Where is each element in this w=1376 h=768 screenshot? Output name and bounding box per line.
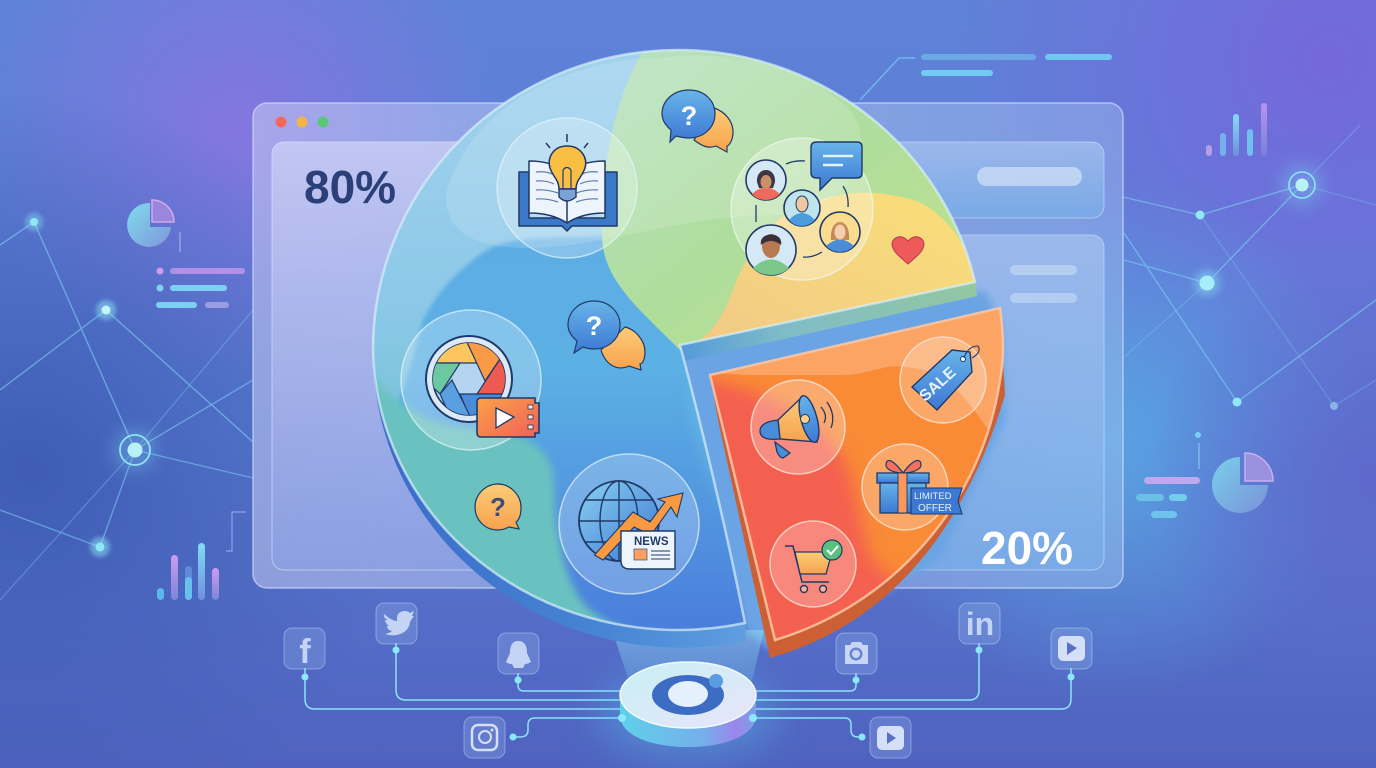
panel lines xyxy=(1010,265,1077,303)
social icon: facebook xyxy=(284,628,325,671)
person avatar xyxy=(784,190,820,226)
social icon: video xyxy=(870,717,911,758)
colour region: yellow xyxy=(696,193,985,343)
icon: gift limited offer xyxy=(862,444,962,530)
social icon: twitter xyxy=(376,603,417,644)
person avatar xyxy=(820,212,860,252)
large pie: 20% slice xyxy=(708,306,1005,658)
label: 80%: 80% xyxy=(304,161,396,213)
icon: globe and news xyxy=(559,454,699,594)
icon: globe and news: NEWS xyxy=(634,536,669,548)
social icon: camera xyxy=(836,633,877,674)
icon: question speech bubbles centre xyxy=(568,301,645,370)
icon: question bubble orange: ? xyxy=(490,492,506,522)
person avatar xyxy=(746,160,786,200)
colour region: teal xyxy=(376,377,622,624)
chat bubble xyxy=(811,142,862,190)
social icon: linkedin: in xyxy=(966,606,994,642)
icon: gift limited offer: LIMITED xyxy=(914,491,952,502)
icon: question speech bubbles top xyxy=(662,90,733,152)
icon: book and lightbulb xyxy=(497,118,637,258)
label: 20%: 20% xyxy=(981,522,1073,574)
window control dots xyxy=(276,116,328,128)
icon: camera shutter and video xyxy=(401,310,541,450)
colour region: red xyxy=(712,374,896,638)
icon: gift limited offer: OFFER xyxy=(918,503,952,514)
network graph: left xyxy=(0,213,253,600)
network graph: right xyxy=(1123,125,1376,410)
mini bar chart: bottom left xyxy=(157,512,246,600)
left content panel xyxy=(272,142,522,570)
social icon: linkedin xyxy=(959,603,1000,644)
right top panel xyxy=(860,142,1104,218)
central hub xyxy=(598,662,778,760)
colour region: pale band xyxy=(722,310,1002,429)
social icon: instagram xyxy=(464,717,505,758)
pie rim highlight xyxy=(373,50,975,630)
social icon: facebook: f xyxy=(299,633,311,671)
colour region: green xyxy=(602,40,990,350)
right bottom panel xyxy=(860,235,1104,570)
social icon: youtube xyxy=(1051,628,1092,669)
icon: megaphone xyxy=(751,380,845,474)
panel pill xyxy=(977,167,1082,186)
hub light beam xyxy=(612,630,764,690)
colour region: right glow xyxy=(694,406,714,485)
mini pie chart: bottom right xyxy=(1195,432,1273,513)
colour region: light blue xyxy=(373,52,642,402)
gap shadow between slices xyxy=(680,290,1005,650)
icon: question speech bubbles top: ? xyxy=(681,101,697,131)
top-right decorative lines xyxy=(860,54,1112,100)
mini legend: right xyxy=(1136,477,1200,518)
mini bar chart: top right xyxy=(1206,103,1267,156)
social icon: snapchat ghost xyxy=(498,633,539,674)
icon: shopping cart xyxy=(770,521,856,607)
icon: sale tag xyxy=(900,337,986,423)
browser window panel xyxy=(253,103,1123,588)
icon: sale tag: SALE xyxy=(916,364,960,405)
icon: question bubble orange xyxy=(475,484,521,530)
icon: question speech bubbles centre: ? xyxy=(586,311,602,341)
icon: heart xyxy=(892,237,924,264)
mini legend: left xyxy=(156,268,245,308)
mini pie chart: top left xyxy=(127,200,181,252)
large pie: 80% slice xyxy=(372,48,977,648)
icon: people network xyxy=(731,138,873,280)
person avatar xyxy=(746,225,796,275)
connector lines xyxy=(302,643,1074,740)
glass inner overlay xyxy=(446,56,862,248)
